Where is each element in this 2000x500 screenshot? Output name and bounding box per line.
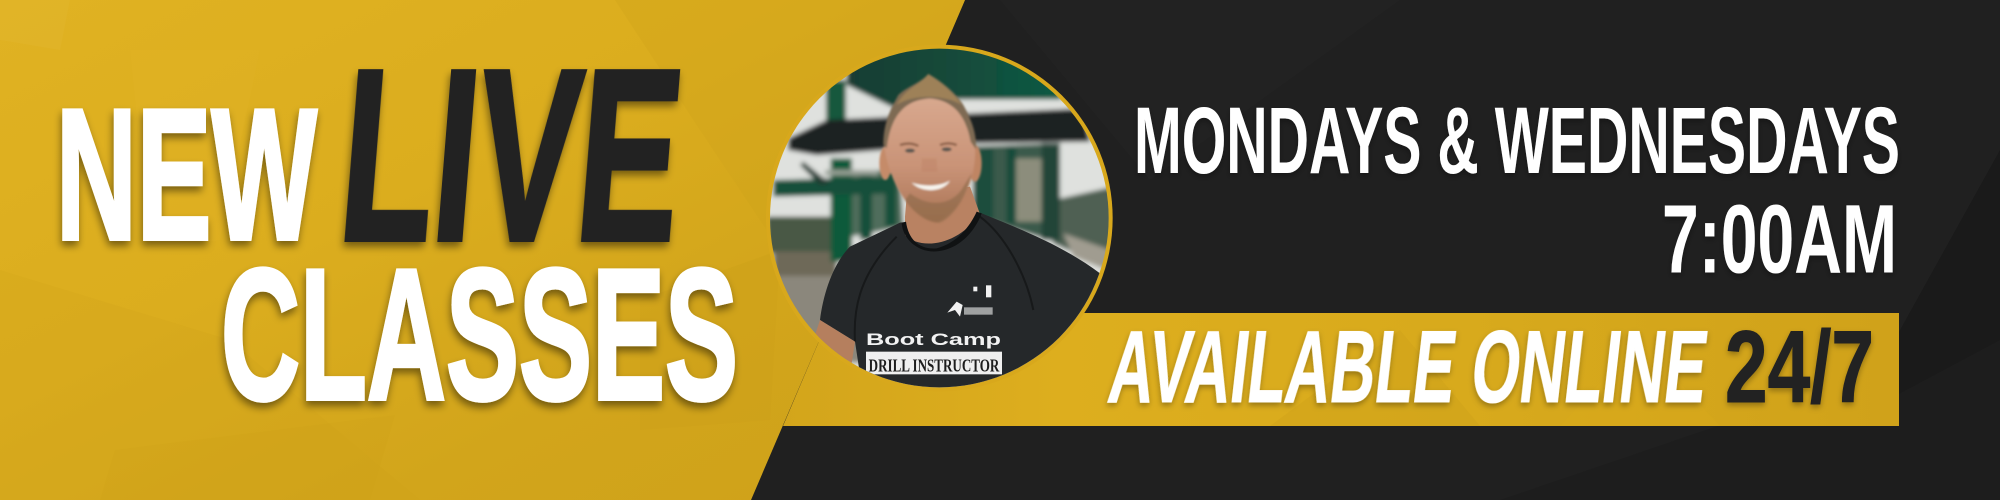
banner text: 24/7: 24/7 — [1725, 310, 1874, 424]
photo ring — [766, 45, 1113, 391]
title: CLASSES: CLASSES — [221, 230, 738, 439]
arm — [815, 320, 855, 363]
title: LIVE: LIVE — [332, 19, 692, 291]
yellow banner — [783, 313, 1899, 426]
schedule time: 7:00AM — [1662, 184, 1897, 294]
shirt text: Boot Camp — [866, 330, 1001, 349]
title: NEW: NEW — [56, 70, 317, 279]
neck — [905, 187, 980, 244]
photo: instructor portrait — [763, 40, 1117, 397]
head — [879, 74, 982, 223]
photo: instructor portrait: DRILL INSTRUCTOR — [869, 355, 1000, 375]
photo background — [763, 40, 1117, 393]
shirt logo — [947, 285, 993, 317]
yellow low-poly panel — [0, 0, 965, 500]
shirt — [820, 213, 1103, 397]
